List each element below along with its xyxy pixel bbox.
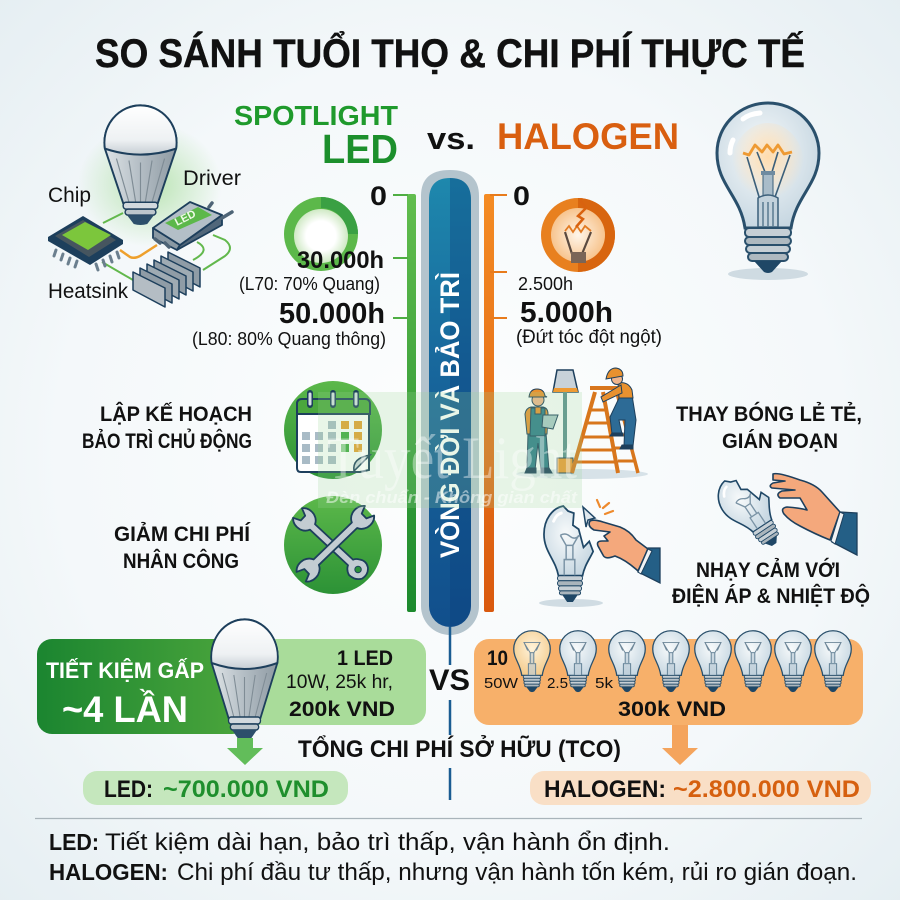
footer summary: LED:	[49, 829, 99, 855]
panel: LED cost	[37, 619, 426, 740]
heading: Halogen: HALOGEN	[497, 116, 679, 157]
LED bulb	[211, 619, 278, 740]
ladder	[572, 388, 638, 473]
text: sensitive to voltage and temperature: NHẠY CẢM VỚI	[696, 558, 840, 582]
result: Halogen total: ~2.800.000 VND	[673, 776, 860, 803]
row of halogen bulbs	[514, 631, 851, 692]
illustration: maintenance workers on ladder	[516, 368, 648, 479]
heading: Spotlight LED	[234, 100, 398, 172]
watermark	[318, 392, 582, 508]
text: spot replacement	[676, 402, 862, 453]
worker on ladder	[601, 368, 636, 449]
text: spot replacement: THAY BÓNG LẺ TẺ,	[676, 402, 862, 426]
Halogen timeline labels	[513, 181, 662, 348]
icon: calendar	[284, 381, 382, 479]
LED timeline labels: 30.000h	[297, 247, 384, 274]
heading: Spotlight LED: LED	[322, 126, 398, 172]
driver	[153, 202, 232, 250]
result: LED total: ~700.000 VND	[163, 776, 329, 803]
LED specs: 10W, 25k hr,	[286, 672, 393, 693]
Halogen specs: 2.5	[547, 675, 568, 692]
Halogen specs: 300k VND	[618, 698, 726, 721]
illustration: LED bulb components	[48, 105, 241, 307]
timeline axis: Halogen	[484, 194, 507, 612]
Halogen specs	[484, 647, 726, 721]
text: sensitive to voltage and temperature: ĐIỆN ÁP & NHIỆT ĐỘ	[672, 584, 870, 608]
Halogen specs: 50W	[484, 675, 519, 692]
watermark: Tuyết Light	[327, 425, 577, 491]
text: spot replacement: GIÁN ĐOẠN	[722, 430, 838, 453]
LED timeline labels: (L70: 70% Quang)	[239, 274, 380, 294]
arrow: Halogen to total	[662, 725, 698, 765]
panel: Halogen cost	[474, 631, 863, 725]
LED specs	[286, 647, 395, 721]
text: sensitive to voltage and temperature	[672, 558, 870, 608]
Halogen specs: 5k	[595, 675, 614, 692]
VS label: VS	[429, 664, 470, 697]
title: SO SÁNH TUỔI THỌ & CHI PHÍ THỰC TẾ	[95, 29, 805, 76]
result: Halogen total	[530, 771, 871, 805]
footer summary: HALOGEN:	[49, 859, 168, 885]
label: Chip: Chip	[48, 184, 91, 207]
result: Halogen total: HALOGEN:	[544, 776, 666, 803]
illustration: breaking bulb with hand	[539, 500, 660, 607]
Halogen specs: 10	[487, 647, 508, 670]
text: proactive maintenance: LẬP KẾ HOẠCH	[100, 402, 252, 426]
Halogen timeline labels: 2.500h	[518, 274, 573, 294]
footer summary: Tiết kiệm dài hạn, bảo trì thấp, vận hành ổn định.	[105, 829, 670, 856]
savings text	[46, 658, 204, 730]
result: LED total: LED:	[104, 776, 153, 803]
text: reduced labour cost	[114, 523, 251, 573]
timeline axis: LED	[393, 194, 416, 612]
LED specs: 1 LED	[337, 647, 393, 670]
pillar label: VÒNG ĐỜI VÀ BẢO TRÌ	[433, 272, 465, 558]
central pillar	[421, 170, 479, 800]
LED timeline labels: 50.000h	[279, 298, 385, 330]
savings text: ~4 LẦN	[62, 689, 188, 730]
text: reduced labour cost: NHÂN CÔNG	[123, 549, 239, 573]
heading: Spotlight LED: SPOTLIGHT	[234, 100, 398, 131]
label: Driver: Driver	[183, 167, 241, 190]
label: Heatsink: Heatsink	[48, 280, 128, 303]
LED timeline labels: (L80: 80% Quang thông)	[192, 329, 386, 349]
driver: LED	[173, 208, 198, 229]
heatsink	[133, 252, 200, 307]
LED bulb	[104, 105, 177, 225]
illustration: halogen bulb	[717, 103, 819, 280]
footer summary: Chi phí đầu tư thấp, nhưng vận hành tốn kém, rủi ro gián đoạn.	[177, 859, 857, 886]
worker with clipboard	[525, 389, 558, 473]
text: proactive maintenance: BẢO TRÌ CHỦ ĐỘNG	[82, 429, 252, 453]
illustration: broken bulb and reaching hand	[710, 466, 857, 558]
Halogen timeline labels: (Đứt tóc đột ngột)	[516, 327, 662, 348]
chip	[48, 216, 123, 270]
heading: TCO: TỔNG CHI PHÍ SỞ HỮU (TCO)	[298, 734, 621, 763]
LED specs: 200k VND	[289, 698, 395, 721]
heading: vs.: vs.	[427, 121, 475, 156]
footer summary	[49, 829, 857, 886]
text: reduced labour cost: GIẢM CHI PHÍ	[114, 523, 251, 546]
Halogen timeline labels: 0	[513, 181, 530, 211]
LED timeline labels: 0	[370, 181, 387, 211]
LED timeline labels	[192, 181, 387, 349]
Halogen timeline labels: 5.000h	[520, 297, 613, 329]
savings text: TIẾT KIỆM GẤP	[46, 658, 204, 683]
watermark: Đèn chuẩn - Không gian chất	[326, 488, 578, 507]
lamp	[553, 370, 578, 473]
result: LED total	[83, 771, 348, 805]
icon: broken filament	[541, 198, 615, 272]
arrow: LED to total	[227, 738, 263, 765]
icon: LED light ring	[284, 197, 358, 271]
icon: crossed wrenches	[284, 496, 382, 594]
text: proactive maintenance	[82, 402, 252, 453]
